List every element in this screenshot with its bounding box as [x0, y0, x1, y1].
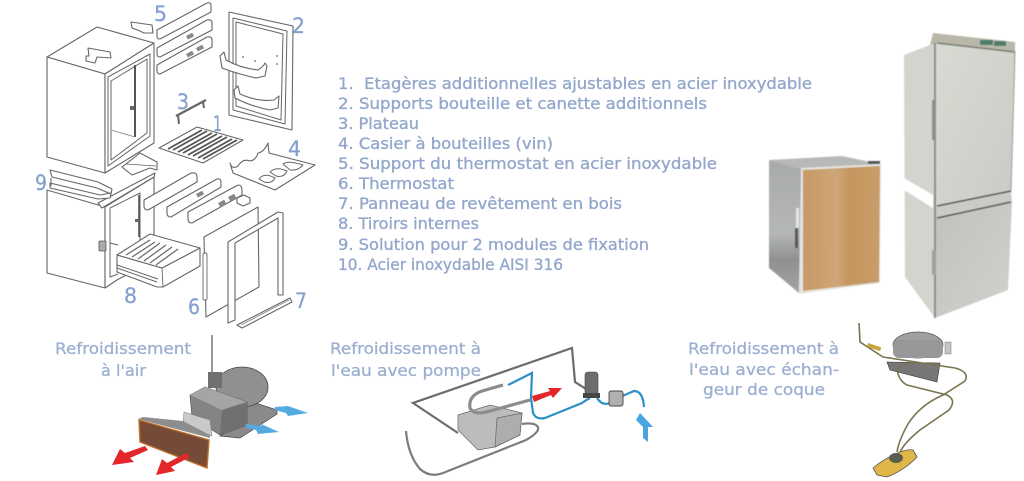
numbered part labels — [35, 2, 307, 319]
illustration: air-cooled compressor — [112, 335, 308, 475]
numbered part labels: 3 — [177, 90, 189, 114]
photo: tall two-module fridge — [904, 33, 1015, 318]
shelf, part 1 — [159, 127, 243, 163]
features list: 4. Casier à bouteilles (vin) — [338, 134, 553, 153]
caption: air cooling: Refroidissement — [55, 339, 191, 358]
features list: 10. Acier inoxydable AISI 316 — [338, 255, 563, 274]
rail under upper cabinet — [122, 153, 157, 175]
numbered part labels: 4 — [288, 137, 301, 161]
illustration: pump water cooling — [406, 348, 653, 475]
features list: 8. Tiroirs internes — [338, 214, 479, 233]
numbered part labels: 8 — [124, 284, 137, 308]
pump — [583, 372, 600, 398]
lower thermostat strips — [144, 173, 250, 223]
numbered part labels: 5 — [154, 2, 167, 26]
features list: 6. Thermostat — [338, 174, 454, 193]
caption: water cooling with hull heat exchanger: Refroidissement à — [688, 339, 839, 358]
red outlet arrows — [112, 446, 190, 475]
features list: 3. Plateau — [338, 114, 419, 133]
upper thermostat strips — [157, 3, 212, 74]
features list: 7. Panneau de revêtement en bois — [338, 194, 622, 213]
blue up arrow — [636, 413, 653, 442]
caption: water cooling with hull heat exchanger — [688, 339, 839, 399]
caption: water cooling with pump: l'eau avec pompe — [331, 361, 481, 380]
caption: water cooling with hull heat exchanger: geur de coque — [703, 380, 825, 399]
bottle tray, part 4 — [230, 143, 315, 190]
lower cabinet — [47, 173, 155, 288]
caption: water cooling with pump — [330, 339, 481, 380]
blue water pipes — [508, 373, 644, 418]
handle, part 3 — [176, 100, 206, 124]
caption: air cooling: à l'air — [101, 361, 146, 380]
blue inlet arrows — [245, 405, 308, 434]
drawer, part 8 — [117, 234, 200, 287]
numbered part labels: 9 — [35, 171, 47, 195]
features list: 2. Supports bouteille et canette additionnels — [338, 94, 707, 113]
features list: 5. Support du thermostat en acier inoxydable — [338, 154, 717, 173]
door with bottle supports — [220, 12, 293, 130]
door panel, part 6 — [203, 207, 259, 317]
air outlet grille — [138, 417, 210, 468]
features list: 1. Etagères additionnelles ajustables en acier inoxydable — [338, 74, 812, 93]
photo: small fridge with wood door — [769, 156, 881, 294]
red arrow — [532, 388, 562, 402]
caption: water cooling with pump: Refroidissement à — [330, 339, 481, 358]
exploded parts diagram — [35, 2, 315, 328]
caption: water cooling with hull heat exchanger: l'eau avec échan- — [689, 360, 839, 379]
illustration: hull exchanger — [859, 323, 966, 477]
numbered part labels: 1 — [213, 112, 222, 136]
caption: air cooling — [55, 339, 191, 380]
numbered part labels: 6 — [188, 295, 200, 319]
numbered part labels: 2 — [292, 14, 305, 38]
features list: 9. Solution pour 2 modules de fixation — [338, 235, 649, 254]
filter — [609, 391, 623, 406]
part 9 fixing rails — [50, 170, 112, 199]
upper thermostat bracket — [131, 22, 153, 33]
wooden panel frame, part 7 — [228, 212, 292, 328]
upper cabinet — [47, 27, 154, 173]
numbered part labels: 7 — [295, 289, 307, 313]
hull plate — [873, 450, 917, 477]
features list — [338, 74, 812, 274]
